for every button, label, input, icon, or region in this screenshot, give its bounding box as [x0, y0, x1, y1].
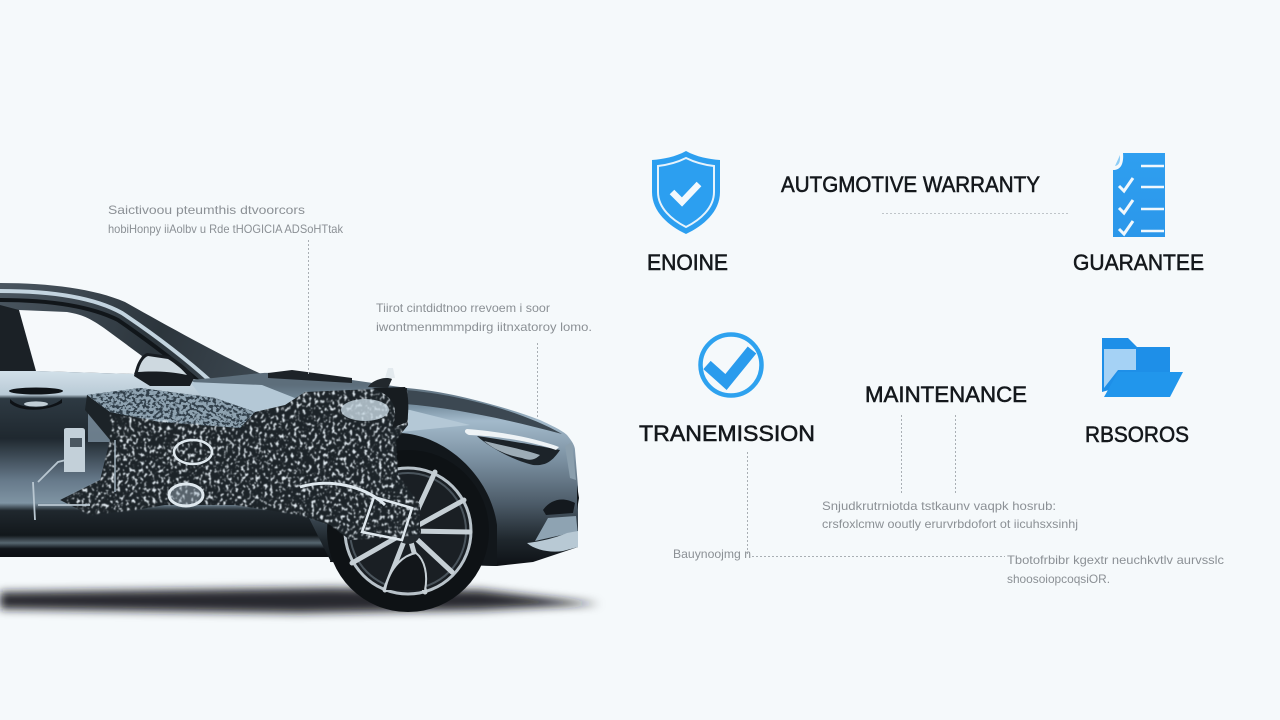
leader line: transmission: [746, 452, 748, 555]
side mirror: [134, 353, 194, 386]
engine upper pale band: [87, 388, 255, 428]
callout: upper left note: Saictivoou pteumthis dtvoorcors: [108, 203, 305, 217]
car illustration with engine cutaway: [0, 283, 600, 613]
heading: guarantee: GUARANTEE: [1073, 250, 1204, 275]
engine cutaway base: [60, 388, 420, 540]
tyre: [327, 450, 489, 612]
engine cutaway light detail: [60, 388, 420, 540]
heading: transmission: TRANEMISSION: [639, 421, 815, 446]
door lighter panel: [88, 397, 120, 442]
wheel arch: [330, 433, 497, 566]
icon: circle check: [700, 334, 762, 396]
ground shadow: [0, 588, 600, 613]
divider: title: [882, 212, 1068, 214]
windshield base: [268, 370, 352, 383]
bumper intake and splitter: [527, 442, 579, 552]
door panel: [0, 371, 340, 557]
window trim: [0, 291, 217, 387]
front quarter panel: [190, 373, 578, 566]
car roof and windshield: [0, 283, 270, 390]
connector: bottom dotted line: [752, 556, 1005, 558]
callout: records note: [1007, 553, 1224, 586]
side window: [19, 310, 142, 374]
heading: engine: ENOINE: [647, 250, 728, 275]
door handle: [9, 388, 63, 410]
callout: maintenance note: Snjudkrutrniotda tstkaunv vaqpk hosrub:: [822, 499, 1056, 513]
engine cutaway dark detail: [87, 388, 255, 428]
hood dark band: [405, 390, 562, 434]
callout: hood note: iwontmenmmmpdirg iitnxatoroy lomo.: [376, 320, 592, 334]
icon: shield check: [652, 151, 720, 234]
engine cover top: [341, 368, 408, 428]
oil filter part: [64, 428, 85, 472]
leader lines: maintenance: [902, 415, 956, 495]
leader line: upper left note: [308, 240, 310, 376]
leader line: hood note: [536, 343, 538, 418]
callout: records note: Tbotofrbibr kgextr neuchkvtlv aurvsslc: [1007, 553, 1224, 567]
title: AUTGMOTIVE WARRANTY: [781, 172, 1040, 197]
callout: hood note: Tiirot cintdidtnoo rrevoem i soor: [376, 301, 550, 315]
callout: transmission note: Bauynoojmg n: [673, 547, 751, 561]
alloy wheel: [345, 468, 471, 594]
callout: records note: shoosoiopcoqsiOR.: [1007, 572, 1110, 586]
rear pillar: [0, 305, 36, 372]
callout: upper left note: [108, 203, 344, 236]
callout: upper left note: hobiHonpy iiAolbv u Rde tHOGICIA ADSoHTtak: [108, 222, 344, 236]
engine parts: [33, 440, 412, 540]
callout: hood note: [376, 301, 592, 334]
callout: maintenance note: crsfoxlcmw ooutly erurvrbdofort ot iicuhsxsinhj: [822, 517, 1078, 531]
callout: maintenance note: [822, 499, 1078, 531]
heading: maintenance: MAINTENANCE: [865, 382, 1027, 407]
heading: records: RBSOROS: [1085, 422, 1189, 447]
headlight: [465, 429, 560, 465]
fender pale panel: [190, 382, 470, 432]
icon: folder: [1102, 338, 1183, 397]
icon: checklist document: [1113, 153, 1165, 237]
